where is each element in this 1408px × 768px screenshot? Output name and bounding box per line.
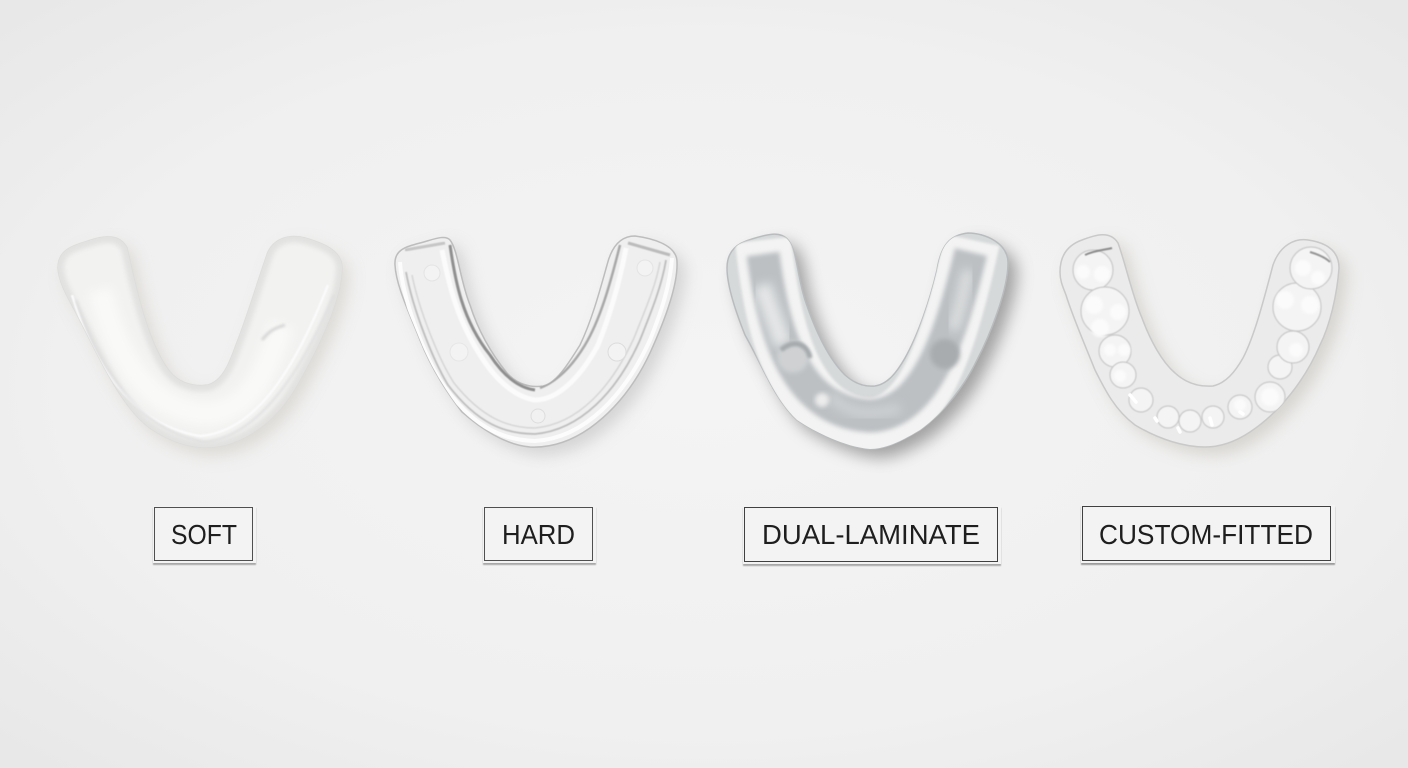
label: soft: SOFT	[171, 519, 237, 550]
label: dual-laminate: DUAL-LAMINATE	[762, 519, 980, 550]
label: hard: HARD	[502, 519, 575, 550]
mouthguard: hard	[395, 236, 685, 455]
label: custom-fitted: CUSTOM-FITTED	[1099, 519, 1313, 550]
mouthguard: dual-laminate	[727, 233, 1017, 458]
label: soft	[153, 506, 256, 565]
label: dual-laminate	[743, 506, 1001, 566]
mouthguard: soft	[58, 237, 349, 455]
label: custom-fitted	[1081, 505, 1335, 565]
mouthguard: custom-fitted	[1060, 235, 1347, 455]
label: hard	[483, 506, 596, 565]
